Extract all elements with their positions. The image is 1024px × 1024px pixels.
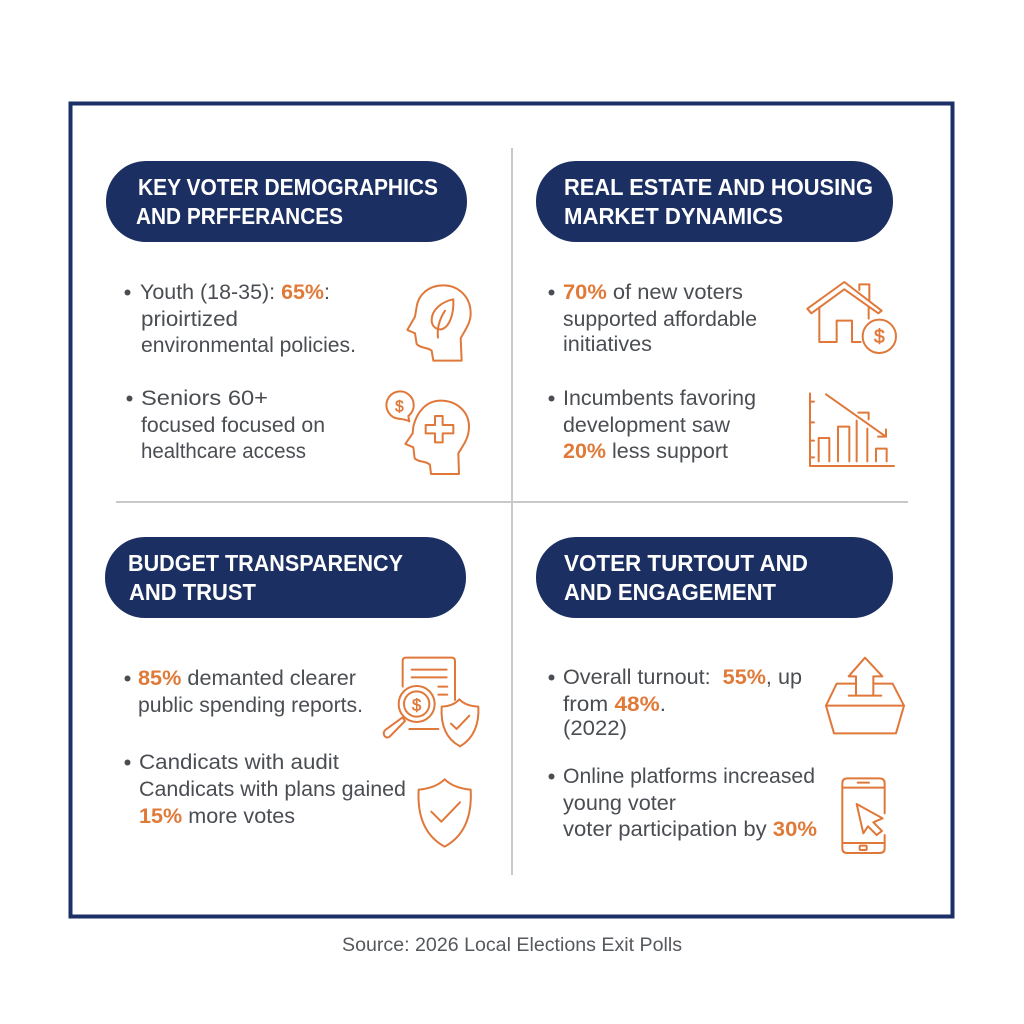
text: audit candidates: 15% more votes	[139, 804, 295, 828]
heading: budget transparency: BUDGET TRANSPARENCY	[128, 550, 403, 576]
text: seniors priorities	[126, 386, 325, 463]
heading: real estate and housing	[536, 161, 893, 242]
text: online platforms: voter participation by 30%	[563, 817, 817, 841]
text: incumbents: development saw	[563, 413, 730, 437]
text: new voters: initiatives	[563, 332, 652, 356]
text: overall turnout: Overall turnout: 55%, up	[563, 665, 802, 689]
icon: house with dollar coin: $	[874, 327, 885, 348]
heading: budget transparency: AND TRUST	[129, 579, 257, 605]
heading: key voter demographics: KEY VOTER DEMOGRAPHICS	[138, 174, 438, 200]
icon: smartphone with cursor	[842, 778, 885, 853]
text: incumbents: Incumbents favoring	[563, 386, 756, 410]
text: overall turnout: from 48%.	[563, 692, 666, 716]
text: spending reports: public spending reports.	[138, 693, 363, 717]
text: online platforms	[548, 764, 817, 841]
outer frame	[70, 104, 952, 916]
heading: voter turnout: VOTER TURTOUT AND	[564, 550, 808, 576]
text: new voters	[548, 280, 757, 356]
icon: ballot box with up arrow	[826, 658, 904, 733]
source note: Source: 2026 Local Elections Exit Polls	[342, 935, 682, 956]
icon: declining bar chart	[810, 393, 894, 466]
panel: key voter demographics	[106, 161, 471, 474]
text: online platforms: Online platforms increased	[563, 764, 815, 788]
panel: budget transparency	[105, 537, 478, 847]
text: youth preferences: Youth (18-35): 65%:	[140, 280, 330, 304]
icon: report, magnifier and shield: $	[412, 695, 421, 714]
text: youth preferences: environmental policies.	[141, 333, 356, 357]
icon: report, magnifier and shield	[384, 658, 478, 746]
heading: voter turnout: AND ENGAGEMENT	[564, 579, 777, 605]
text: seniors priorities: focused focused on	[141, 413, 325, 437]
icon: head with leaf	[407, 285, 471, 361]
heading: key voter demographics: AND PRFFERANCES	[136, 203, 343, 229]
panel: real estate and housing	[536, 161, 896, 466]
heading: real estate and housing: MARKET DYNAMICS	[564, 203, 783, 229]
text: youth preferences: prioirtized	[141, 307, 238, 331]
icon: head with medical cross and dollar bubble	[386, 391, 469, 474]
text: seniors priorities: healthcare access	[141, 439, 306, 463]
icon: house with dollar coin	[807, 282, 896, 353]
text: youth preferences	[124, 280, 356, 357]
text: incumbents	[548, 386, 756, 463]
text: new voters: 70% of new voters	[563, 280, 743, 304]
text: new voters: supported affordable	[563, 307, 757, 331]
text: spending reports	[124, 666, 363, 717]
text: seniors priorities: Seniors 60+	[141, 386, 268, 410]
heading: budget transparency	[105, 537, 466, 618]
text: audit candidates: Candicats with plans gained	[139, 777, 406, 801]
icon: head with medical cross and dollar bubble: $	[395, 398, 404, 415]
heading: voter turnout	[536, 537, 893, 618]
heading: real estate and housing: REAL ESTATE AND HOUSING	[564, 174, 873, 200]
icon: shield with check	[418, 779, 471, 847]
panel: voter turnout	[536, 537, 904, 853]
text: overall turnout	[548, 665, 802, 740]
text: audit candidates	[124, 750, 406, 828]
text: audit candidates: Candicats with audit	[139, 750, 339, 774]
text: online platforms: young voter	[563, 791, 676, 815]
heading: key voter demographics	[106, 161, 467, 242]
text: incumbents: 20% less support	[563, 439, 728, 463]
text: spending reports: 85% demanted clearer	[138, 666, 356, 690]
text: overall turnout: (2022)	[563, 716, 627, 740]
